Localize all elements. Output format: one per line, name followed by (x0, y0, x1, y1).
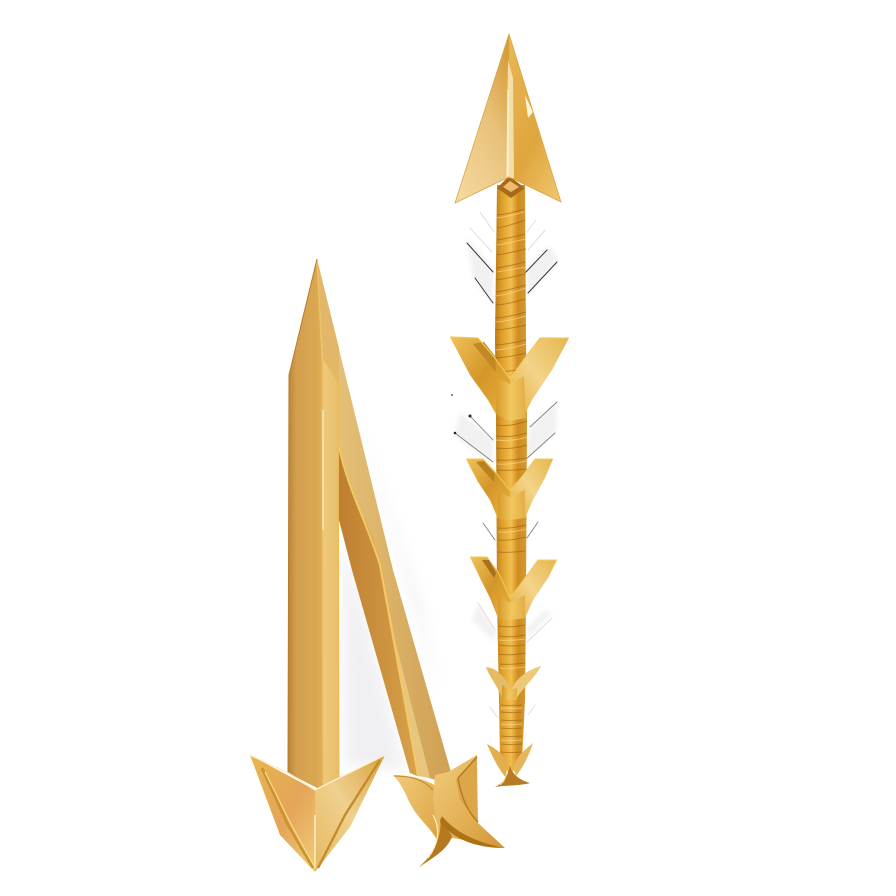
arrowhead: twisted flower tail (393, 755, 505, 868)
fletching 4 (486, 666, 541, 700)
fletching 1 (450, 337, 569, 421)
feathers (451, 212, 558, 718)
diagonal shaft (317, 259, 451, 780)
shadow between shafts (342, 380, 440, 770)
vertical shaft with blade tip (288, 259, 339, 788)
arrowhead: left downward (250, 755, 385, 872)
fletching 3 (470, 557, 557, 620)
arrowhead: top (455, 34, 561, 203)
shaft (495, 185, 527, 775)
tail nock (487, 743, 533, 787)
arrow: right upward arrow with fletchings (450, 34, 569, 787)
arrow: large left arrow pair (250, 259, 505, 872)
fletching 2 (466, 459, 553, 520)
shaft wrap bands (495, 209, 527, 752)
